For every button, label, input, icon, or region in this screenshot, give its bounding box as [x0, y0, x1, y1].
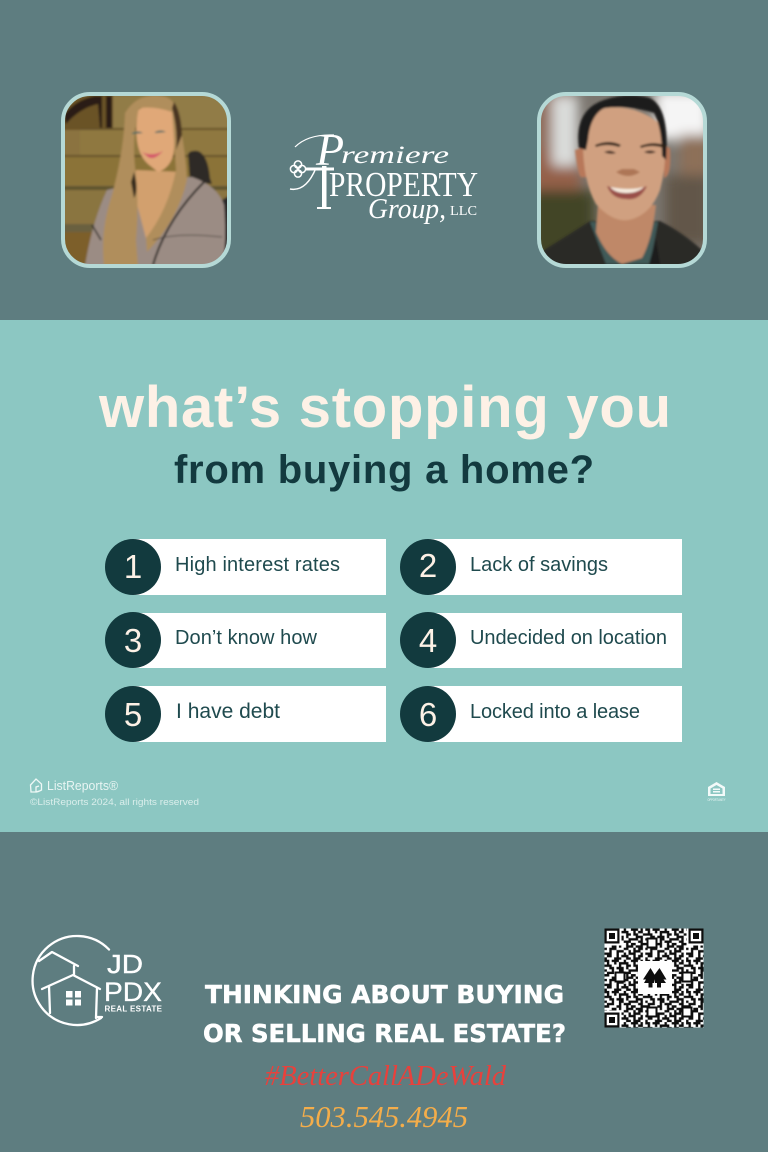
logo icon: key and large T: [290, 135, 334, 209]
reason 5: I have debt: 5: [124, 696, 142, 733]
reason 1: high interest rates: High interest rates: [175, 554, 340, 576]
icon: equal housing opportunity: OPPORTUNITY: [708, 797, 726, 802]
QR centre panel with arrows icon: [638, 961, 672, 994]
reason 6: locked into a lease: Locked into a lease: [470, 701, 640, 723]
logo word: Premiere: remiere: [341, 142, 449, 169]
middle panel: [0, 320, 768, 832]
logo word: Premiere: P: [315, 124, 344, 175]
reason 2: lack of savings: Lack of savings: [470, 554, 608, 576]
reason 1: high interest rates: 1: [124, 548, 142, 585]
phone number: 503.545.4945: [300, 1099, 468, 1134]
icon: equal housing opportunity: [708, 782, 726, 802]
logo text: PDX: PDX: [104, 977, 162, 1007]
reason 5: I have debt: I have debt: [176, 700, 280, 723]
logo word: Property: PROPERTY: [329, 165, 478, 204]
reason 5: I have debt: [105, 686, 386, 742]
call to action line 1: THINKING ABOUT BUYING: [205, 980, 564, 1009]
reason 4: undecided on location: 4: [419, 622, 437, 659]
photo: female agent: [63, 94, 231, 268]
logo word: Group: Group,: [368, 193, 446, 225]
footer band: [0, 832, 768, 1152]
reason 6: locked into a lease: [400, 686, 682, 742]
reason 2: lack of savings: [400, 539, 682, 595]
logo text: JD: JD: [107, 949, 143, 979]
copyright line: ©ListReports 2024, all rights reserved: [30, 797, 199, 808]
reason 1: high interest rates: [105, 539, 386, 595]
QR finder patterns: [604, 928, 704, 1028]
QR alignment marks: [616, 938, 692, 1016]
reason 4: undecided on location: Undecided on location: [470, 627, 667, 649]
header band: [0, 0, 768, 320]
heading: what's stopping you: what’s stopping you: [98, 375, 671, 440]
logo text: Real Estate: REAL ESTATE: [104, 1004, 163, 1014]
footer call to action: [203, 980, 566, 1048]
reason 6: locked into a lease: 6: [419, 696, 437, 733]
reason 3: don't know how: 3: [124, 622, 142, 659]
ListReports wordmark: ListReports®: [47, 779, 119, 793]
icon: circle with houses: [33, 936, 109, 1025]
subheading: from buying a home?: from buying a home?: [174, 448, 594, 492]
reason 3: don't know how: [105, 612, 386, 668]
hashtag: #BetterCallADeWald: [265, 1060, 506, 1092]
QR code: [604, 928, 704, 1028]
photo: male agent: [530, 90, 710, 268]
reason 3: don't know how: Don’t know how: [175, 627, 318, 649]
logo: Premiere Property Group: [290, 124, 478, 225]
call to action line 2: OR SELLING REAL ESTATE?: [203, 1019, 566, 1048]
reason 2: lack of savings: 2: [419, 547, 437, 584]
logo suffix: LLC: LLC: [450, 204, 477, 219]
logo: JD PDX Real Estate: [33, 936, 163, 1025]
reason 4: undecided on location: [400, 612, 682, 668]
ListReports brand and copyright: [30, 779, 199, 808]
icon: ListReports house: [30, 779, 42, 792]
